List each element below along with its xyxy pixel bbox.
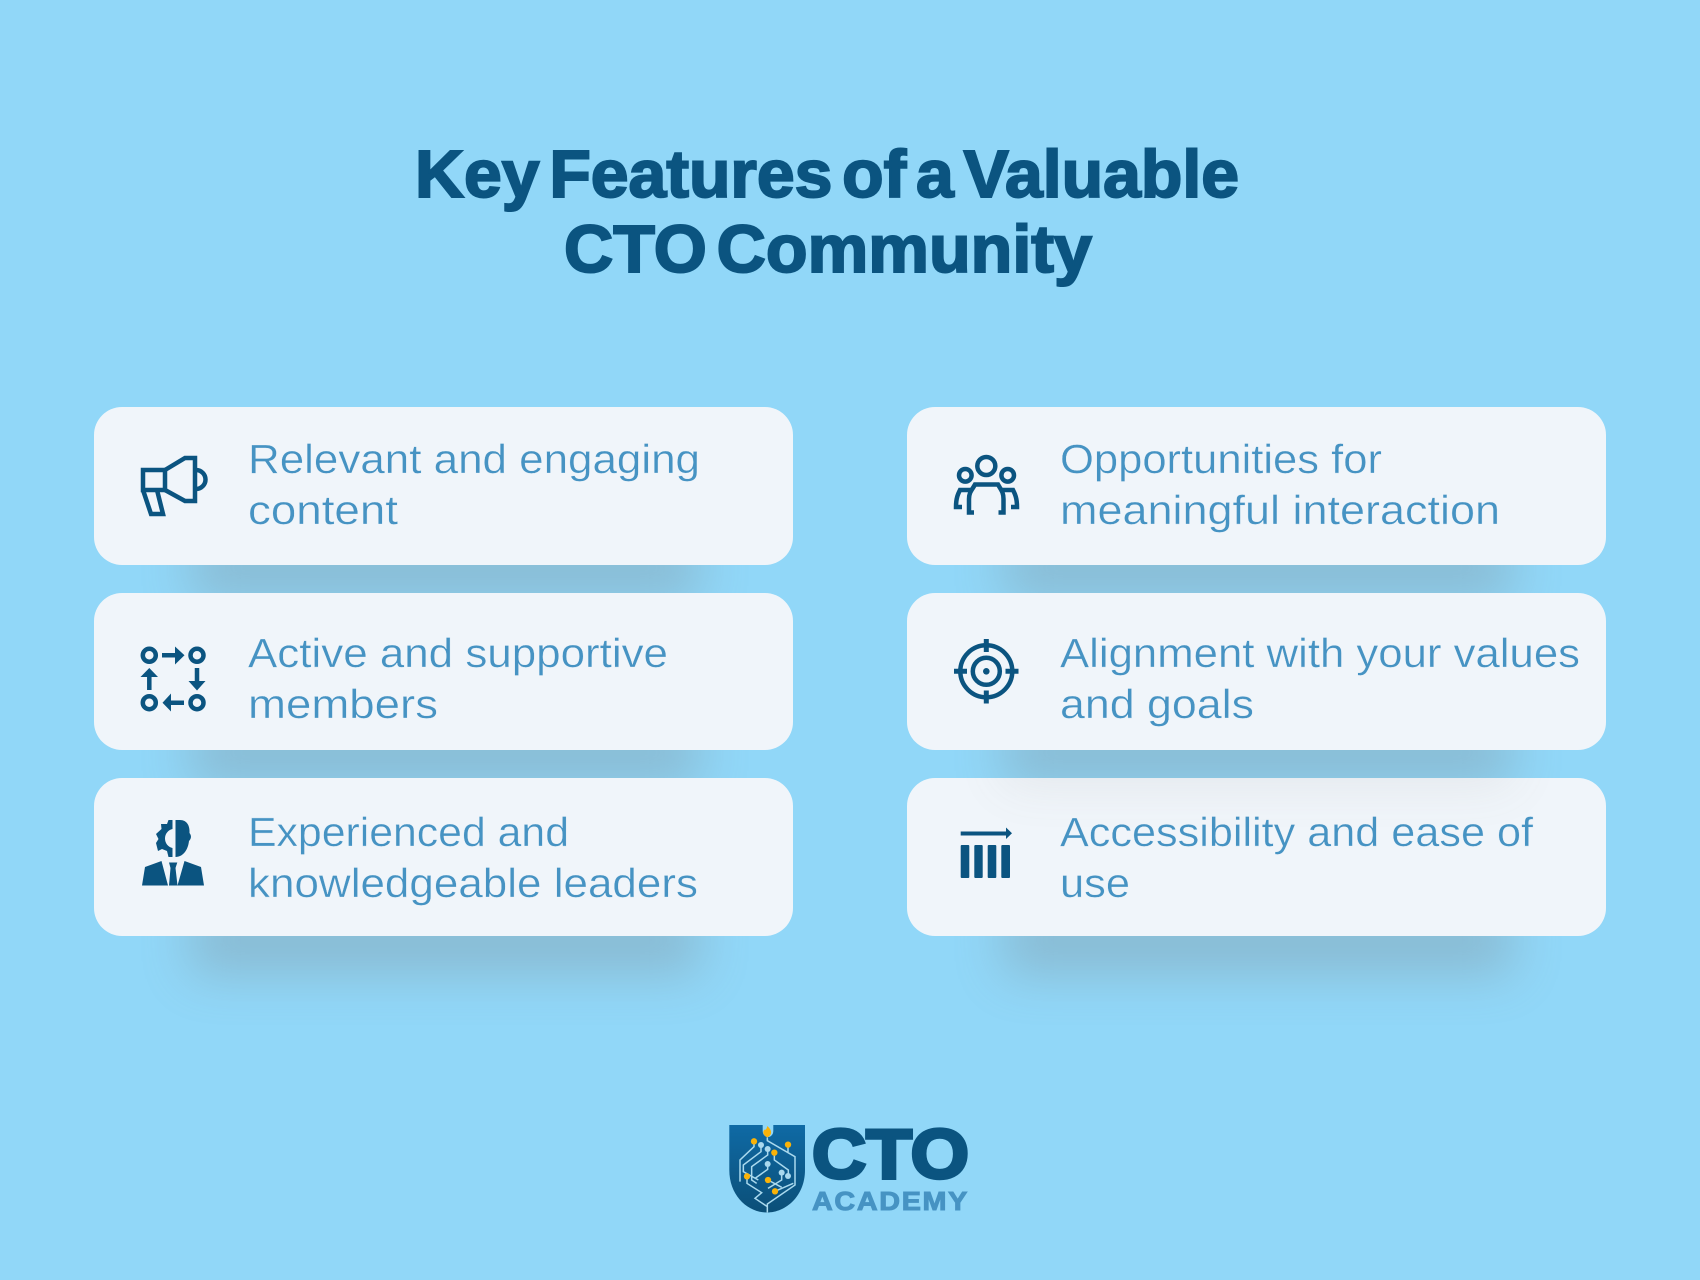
text: opportunities xyxy=(1060,436,1500,533)
text: relevant content: content xyxy=(248,487,399,533)
text: alignment: Alignment with your values xyxy=(1060,630,1580,676)
icon: cycle of nodes xyxy=(140,646,206,712)
logo wordmark: ACADEMY xyxy=(812,1186,969,1216)
text: active members xyxy=(248,630,668,727)
panel: active members xyxy=(94,593,793,750)
icon: team xyxy=(956,457,1017,512)
panel: opportunities xyxy=(907,407,1606,565)
logo wordmark: CTO xyxy=(812,1115,969,1193)
panel: experienced leaders xyxy=(94,778,793,936)
text: accessibility xyxy=(1060,809,1534,906)
icon: target xyxy=(954,639,1018,704)
text: opportunities: meaningful interaction xyxy=(1060,487,1500,533)
logo xyxy=(729,1115,969,1216)
panel: accessibility xyxy=(907,778,1606,936)
logo shield xyxy=(729,1125,805,1212)
icon: leader with gear xyxy=(142,820,204,886)
text: relevant content: Relevant and engaging xyxy=(248,436,700,482)
text: alignment: and goals xyxy=(1060,681,1254,727)
text: opportunities: Opportunities for xyxy=(1060,436,1382,482)
title: CTO Community xyxy=(564,212,1092,287)
panel: alignment xyxy=(907,593,1606,750)
panel: relevant content xyxy=(94,407,793,565)
text: experienced leaders: knowledgeable leaders xyxy=(248,860,698,906)
text: accessibility: use xyxy=(1060,860,1130,906)
text: accessibility: Accessibility and ease of xyxy=(1060,809,1534,855)
icon: bars with arrow xyxy=(961,828,1012,878)
text: active members: members xyxy=(248,681,438,727)
title xyxy=(415,137,1239,287)
text: relevant content xyxy=(248,436,700,533)
icon: megaphone xyxy=(143,458,206,514)
text: experienced leaders: Experienced and xyxy=(248,809,569,855)
text: active members: Active and supportive xyxy=(248,630,668,676)
text: alignment xyxy=(1060,630,1580,727)
title: Key Features of a Valuable xyxy=(415,137,1239,212)
text: experienced leaders xyxy=(248,809,698,906)
